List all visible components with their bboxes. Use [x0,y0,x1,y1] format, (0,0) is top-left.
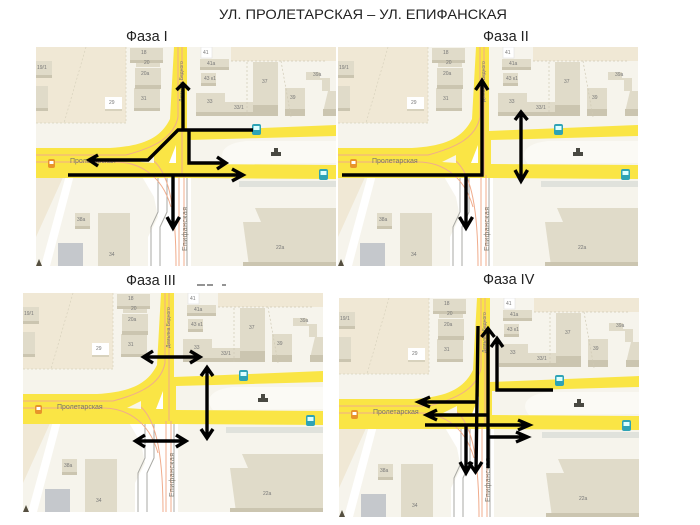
panel: phase III map: Пролетарская [57,404,103,411]
arrows: phase II [342,80,528,228]
panel: phase III map: 39а [300,318,309,324]
panel: phase IV map: 18 [444,301,450,307]
panel: phase II map: 18 [443,50,449,56]
panel: phase I map: 39 [290,95,296,101]
panel: phase I map: 39а [313,72,322,78]
panel: phase II map: 34 [411,252,417,258]
panel: phase I map: 41а [207,61,216,67]
panel: phase II map: 39а [615,72,624,78]
panel: phase II map: 38а [379,217,388,223]
panel: phase IV map: 43 к1 [507,327,519,333]
panel: phase III map: 39 [277,341,283,347]
heading: phase III: Фаза III [126,273,176,289]
panel: phase II map: Пролетарская [372,158,418,165]
panel: phase IV map: 20 [447,311,453,317]
panel: phase IV map: 29 [412,351,418,357]
panel: phase IV map: 38а [380,468,389,474]
panel: phase I map: Демьяна Бедного [179,61,185,102]
panel: phase III map: 33 [194,345,200,351]
panel: phase I map: 22а [276,245,285,251]
scan artifact [197,284,226,286]
panel: phase III map: 37 [249,325,255,331]
panel: phase II map: 31 [443,96,449,102]
panel: phase I map: 37 [262,79,268,85]
panel: phase I map: 33/1 [234,105,244,111]
panel: phase III map: 38а [64,463,73,469]
panel: phase IV map: 39 [593,346,599,352]
panel: phase III map: 22а [263,491,272,497]
panel: phase II map [338,47,638,266]
panel: phase IV map [339,298,639,517]
panel: phase I map: 18 [141,50,147,56]
panel: phase IV map: 41а [510,312,519,318]
panel: phase IV map: Демьяна Бедного [482,312,488,353]
panel: phase III map: 33/1 [221,351,231,357]
panel: phase IV map: 33/1 [537,356,547,362]
panel: phase I map: 43 к1 [204,76,216,82]
panel: phase III map: Епифанская [169,453,176,497]
arrows: phase III [136,351,213,447]
panel: phase II map: 22а [578,245,587,251]
panel: phase III map [23,293,323,512]
panel: phase II map: 41а [509,61,518,67]
panel: phase I map: 19/1 [37,65,47,71]
panel: phase I map: 41 [203,50,209,56]
panel: phase III map: 29 [96,346,102,352]
panel: phase II map: 43 к1 [506,76,518,82]
arrows: phase I [68,84,253,228]
heading: phase I: Фаза I [126,29,168,45]
panel: phase I map: 38а [77,217,86,223]
panel: phase II map: Демьяна Бедного [481,61,487,102]
panel: phase III map: 41а [194,307,203,313]
panel: phase IV map: 20а [444,322,453,328]
panel: phase II map: 20а [443,71,452,77]
panel: phase I map: 29 [109,100,115,106]
panel: phase IV map: 33 [510,350,516,356]
panel: phase III map: 20 [131,306,137,312]
panel: phase IV map: 37 [565,330,571,336]
panel: phase III map: 41 [190,296,196,302]
panel: phase III map: 19/1 [24,311,34,317]
panel: phase III map: 31 [128,342,134,348]
panel: phase I map: 20а [141,71,150,77]
panel: phase IV map: 22а [579,496,588,502]
panel: phase III map: Демьяна Бедного [166,307,172,348]
panel: phase I map: Епифанская [182,207,189,251]
panel: phase III map: 43 к1 [191,322,203,328]
panel: phase I map [36,47,336,266]
panel: phase I map: 20 [144,60,150,66]
panel: phase II map: 29 [411,100,417,106]
panel: phase III map: 34 [96,498,102,504]
panel: phase IV map: 19/1 [340,316,350,322]
panel: phase I map: Пролетарская [70,158,116,165]
title: УЛ. ПРОЛЕТАРСКАЯ – УЛ. ЕПИФАНСКАЯ [219,6,507,22]
panel: phase II map: 33 [509,99,515,105]
panel: phase II map: 37 [564,79,570,85]
panel: phase I map: 31 [141,96,147,102]
heading: phase IV: Фаза IV [483,272,535,288]
panel: phase IV map: Епифанская [485,458,492,502]
panel: phase II map: 39 [592,95,598,101]
heading: phase II: Фаза II [483,29,529,45]
panel: phase II map: 41 [505,50,511,56]
panel: phase II map: Епифанская [484,207,491,251]
panel: phase IV map: Пролетарская [373,409,419,416]
panel: phase I map: 33 [207,99,213,105]
panel: phase I map: 34 [109,252,115,258]
panel: phase II map: 20 [446,60,452,66]
panel: phase II map: 33/1 [536,105,546,111]
panel: phase III map: 20а [128,317,137,323]
panel: phase IV map: 34 [412,503,418,509]
panel: phase II map: 19/1 [339,65,349,71]
arrows: phase IV [418,326,553,473]
panel: phase IV map: 31 [444,347,450,353]
panel: phase IV map: 41 [506,301,512,307]
panel: phase III map: 18 [128,296,134,302]
panel: phase IV map: 39а [616,323,625,329]
